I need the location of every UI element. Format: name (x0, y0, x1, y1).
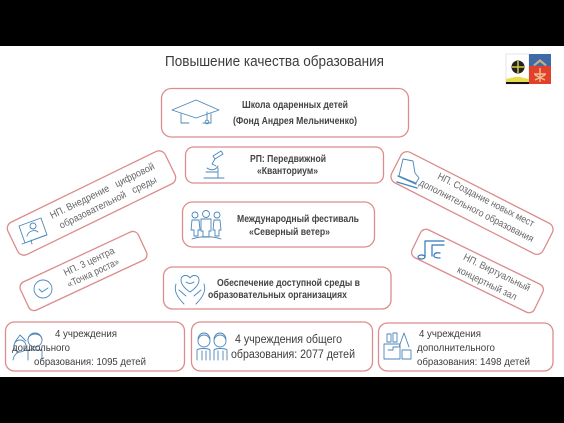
text: preschool: 4 учреждения (55, 328, 117, 340)
text: additional education: образования: 1498 детей (417, 356, 530, 368)
text: festival: «Северный ветер» (249, 227, 330, 238)
text: virtual concert hall: концертный зал (455, 265, 519, 303)
text: Growth Point: НП. 3 центра (62, 245, 117, 279)
icon: check mark in circle (34, 280, 52, 298)
text: general education: образования: 2077 детей (231, 349, 355, 361)
text: general education (231, 334, 355, 361)
text: general education: 4 учреждения общего (235, 334, 342, 346)
panel: NP Growth Point (18, 229, 149, 313)
panel: mobile Quantorium (186, 147, 384, 183)
icon: heart and hands (175, 276, 205, 304)
bottom black band (0, 377, 564, 423)
icon: two pupils (197, 333, 227, 360)
text: additional education: дополнительного (417, 342, 495, 354)
text: new places: дополнительного образования (417, 177, 536, 245)
panel: NP new places (389, 149, 555, 257)
text: Growth Point (61, 245, 122, 290)
text: preschool: образования: 1095 детей (34, 356, 146, 368)
icon: skate (397, 159, 419, 188)
text: school name: (Фонд Андрея Мельниченко) (233, 116, 357, 127)
text: preschool (12, 328, 146, 368)
top black band (0, 0, 564, 46)
text: preschool: дошкольного (12, 342, 70, 354)
panel: NP virtual concert hall (410, 227, 545, 315)
panel: preschool institutions (6, 322, 184, 371)
text: Quantorium: РП: Передвижной (250, 154, 326, 165)
panel: international festival (182, 202, 374, 247)
text: new places: НП. Создание новых мест (435, 171, 536, 230)
icon: drafting tools (384, 333, 411, 359)
text: additional education (417, 328, 530, 368)
panel: school for gifted children (162, 88, 408, 137)
text: festival (237, 213, 359, 238)
text: digital environment: образовательной среды (57, 174, 159, 232)
text: accessible environment (208, 277, 360, 301)
icon: music notes (418, 241, 444, 259)
text: virtual concert hall: НП. Виртуальный (461, 252, 532, 294)
text: additional education: 4 учреждения (419, 328, 481, 340)
text: accessible environment: образовательных организациях (208, 289, 347, 301)
icon: coat of arms (506, 54, 551, 84)
icon: microscope (204, 151, 224, 178)
text: Growth Point: «Точка роста» (66, 257, 122, 290)
panel: NP digital environment (5, 148, 178, 258)
text: school name (233, 100, 357, 127)
icon: two preschool children (13, 333, 42, 360)
icon: graduation cap (172, 100, 219, 124)
text: school name: Школа одаренных детей (242, 100, 348, 111)
text: festival: Международный фестиваль (237, 213, 359, 225)
text: digital environment: НП. Внедрение цифровой (48, 160, 157, 222)
icon: group of people (191, 210, 221, 239)
text: accessible environment: Обеспечение доступной среды в (217, 277, 360, 289)
panel: accessible environment (164, 267, 391, 309)
title: Повышение качества образования (165, 54, 384, 70)
icon: monitor with person (19, 218, 47, 244)
panel: additional education institutions (378, 323, 553, 371)
panel: general education institutions (192, 322, 372, 371)
text: Quantorium (250, 154, 326, 177)
text: Quantorium: «Кванториум» (257, 166, 318, 177)
